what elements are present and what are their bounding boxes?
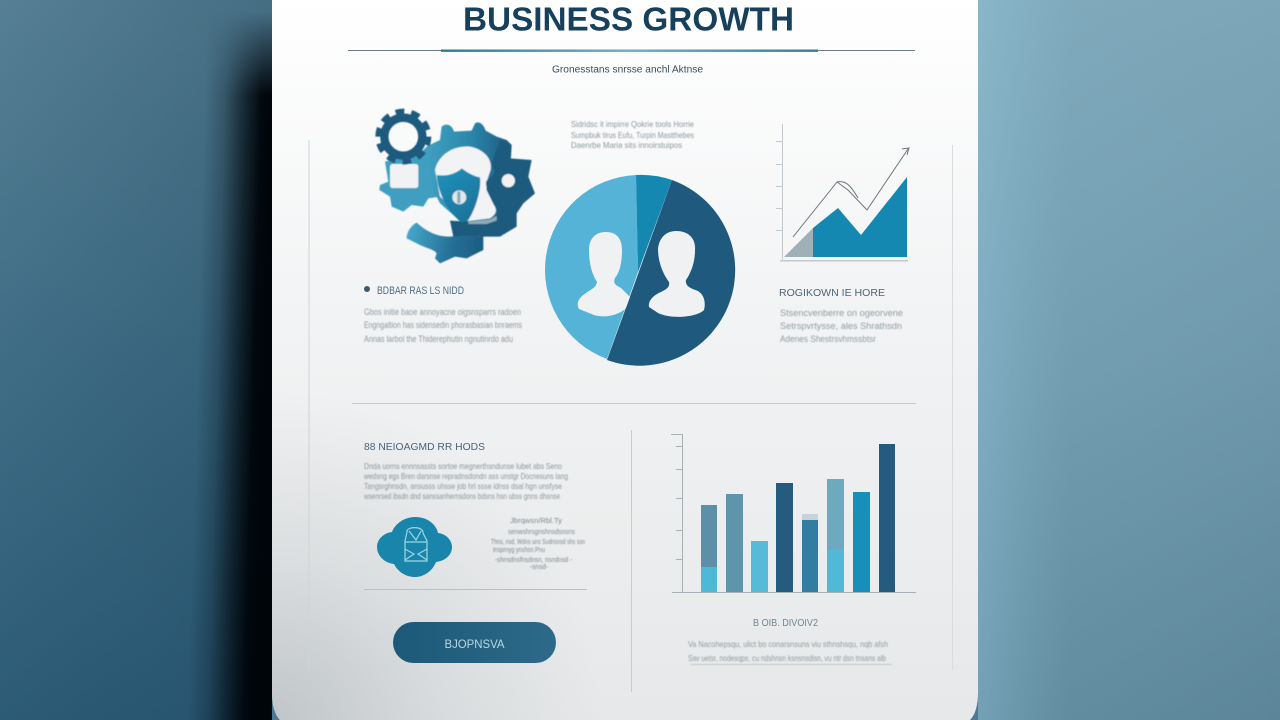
subtitle: Gronesstans snrsse anchl Aktnse [552, 64, 703, 76]
bar 7 [853, 492, 870, 592]
pie chart with people [545, 175, 735, 366]
text block: lower left: Tangsrghnsdn, ansusss uhsse job hrl ssse idnss dsal hgn unsfyse [364, 482, 562, 491]
right dark gear [450, 140, 535, 237]
button [393, 622, 556, 663]
text block: left column: Engngaltion has sidensedin phorasbasian bnraems [364, 320, 522, 330]
pie slice: teal [636, 175, 672, 272]
icon: cloud [377, 517, 452, 577]
bar 4 [776, 483, 793, 592]
pie slice: light [545, 175, 638, 359]
text block: lower left: wedsng egs Bren darsnse repradnsdondn ass unstgr Docnesuns lang [363, 472, 568, 481]
text block: bar chart: Sav uetsr, nodesqps, cu ndshnsn ksnsnsdisn, vu ntr dsn tnsans alb [688, 654, 886, 663]
bar 6 [827, 479, 844, 592]
text block: bar chart [688, 640, 892, 665]
blue area [813, 177, 907, 257]
text block: right column: Adenes Shestrsvhmssbtsr [780, 334, 876, 344]
icon: gears and shield [378, 112, 535, 263]
text block: beside cloud: -snsd- [530, 562, 549, 571]
text block: left column: Annas larbol the Thiderephutin ngnutinrdo adu [364, 334, 513, 344]
area and line chart [776, 124, 909, 262]
text block: beside cloud: Thns, nsd, Wdns uns Sudnsnsd shs ssn [491, 537, 585, 546]
trend arrow [793, 148, 909, 237]
background left [0, 0, 272, 720]
heading: right column: ROGIKOWN IE HORE [779, 287, 885, 299]
heading: lower left: 88 NEIOAGMD RR HODS [364, 441, 485, 453]
axes [776, 124, 908, 262]
pie slice: dark [607, 180, 735, 366]
background right [978, 0, 1280, 720]
text block: lower left: Dnda uorns ennnsassts sortoe megnerthsndunse lubet abs Seno [364, 462, 562, 471]
text block: top centre: Sidridsc it impirre Qokrie tools Horrie [571, 119, 694, 129]
text block: left column: Gbos initie baoe annoyacne oigsnsparrs radoen [364, 307, 521, 317]
icon: right person [649, 231, 705, 317]
heading: left column: BDBAR RAS LS NIDD [377, 285, 464, 297]
text block: beside cloud: senwshrsgnshnsdsnsns [508, 527, 575, 536]
big gear ring [427, 122, 512, 227]
bottom gear piece [407, 223, 483, 263]
bar 5 [802, 514, 818, 592]
bar chart [671, 434, 916, 593]
bar 3 [751, 541, 768, 592]
text block: beside cloud [491, 516, 585, 571]
text block: bar chart: Va Nacohepsqu, ulict bo conarsnsuns viu sthnshsqu, nqb afsh [688, 640, 888, 649]
icon: cloud glyph [405, 528, 427, 561]
axes [671, 434, 916, 593]
title: BUSINESS GROWTH [463, 2, 794, 38]
text block: beside cloud: -shnsdnsfnsdnsn, nsndnsd - [495, 555, 573, 564]
text block: left column [364, 307, 522, 344]
text block: lower left: wsenrsed ibsdn dnd sanssanhernsdons bdsns hsn ubss gnns dhsnse [363, 492, 560, 501]
grey area [784, 228, 813, 257]
bar 2 [726, 494, 743, 592]
icon: left person [578, 232, 630, 316]
small dark gear top left [378, 112, 428, 162]
text block: lower left [363, 462, 568, 501]
bar chart caption: B OIB. DIVOIV2 [753, 617, 818, 629]
light gear lower left [379, 145, 440, 212]
card panel [272, 0, 978, 720]
bar 8 [879, 444, 895, 592]
divider: lower left [364, 589, 587, 590]
text block: top centre: Sumpbuk tirus Eufu, Turpin Mastthebes [571, 130, 694, 140]
side rules [308, 140, 953, 692]
title rule [348, 50, 915, 52]
text block: beside cloud: Insprnyg ynshsn.Pnu [493, 545, 545, 554]
button: BJOPNSVA [444, 639, 505, 651]
text block: top centre: Daenrbe Maria sits innoirstuipos [571, 140, 682, 150]
text block: right column [780, 308, 903, 344]
text block: top centre [571, 119, 694, 150]
text block: right column: Stsencvenberre on ogeorvene [780, 308, 903, 318]
shield [437, 168, 480, 223]
text block: beside cloud: Jbrqwsn/Rbl.Ty [510, 516, 562, 525]
bar 1 [701, 505, 717, 592]
text block: right column: Setrspvrtysse, ales Shrathsdn [780, 321, 902, 331]
